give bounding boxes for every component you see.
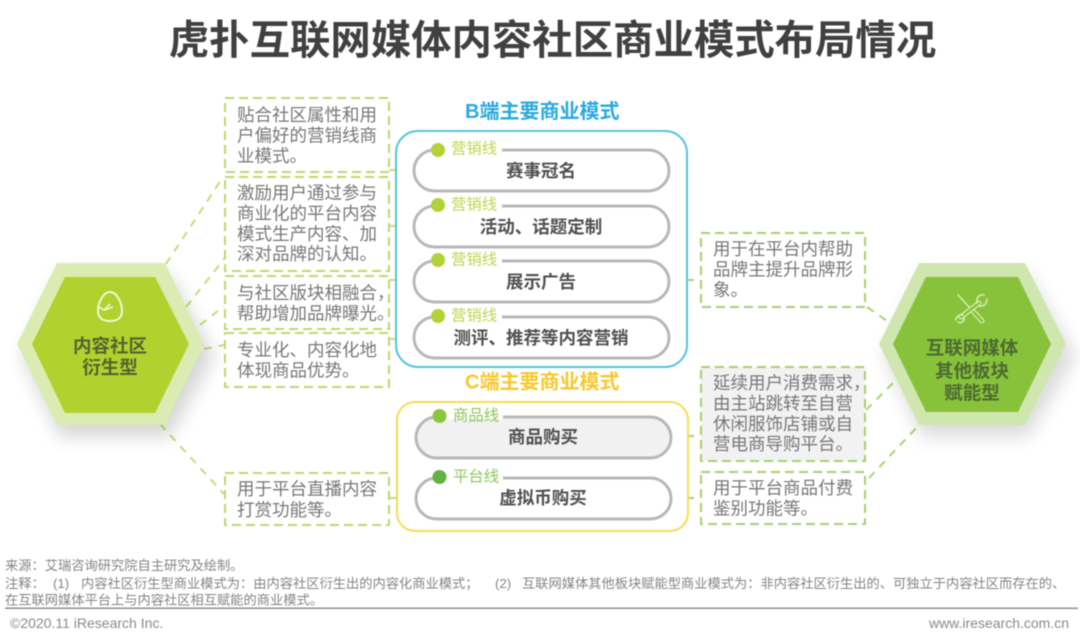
text box: marketing fit: 户偏好的营销线商 bbox=[237, 126, 377, 146]
hexagon label: 互联网媒体 bbox=[926, 338, 1019, 358]
pill: campaign customization bbox=[414, 196, 669, 247]
text box: consumer demand: 休闲服饰店铺或自 bbox=[713, 414, 853, 434]
text box: user generated content: 深对品牌的认知。 bbox=[237, 244, 377, 264]
hexagon label bbox=[926, 338, 1019, 404]
footer rule bbox=[5, 608, 1078, 609]
pill: product purchase: 商品线 bbox=[453, 406, 499, 424]
text box: marketing fit bbox=[225, 98, 389, 172]
pill: event naming: 营销线 bbox=[451, 140, 497, 158]
icon: egg bbox=[98, 292, 122, 321]
pill: display ads: 展示广告 bbox=[506, 272, 576, 292]
text box: user generated content bbox=[225, 177, 389, 271]
connector lines: right hexagon to text boxes bbox=[866, 307, 920, 478]
text box: marketing fit: 业模式。 bbox=[237, 146, 307, 166]
hexagon: content community derived bbox=[17, 263, 214, 437]
text box: brand exposure bbox=[225, 276, 394, 329]
panel: C side business models bbox=[397, 402, 688, 531]
pill: product purchase: 商品购买 bbox=[508, 427, 578, 447]
text box: product advantages: 专业化、内容化地 bbox=[237, 340, 377, 360]
text box: live streaming tips bbox=[225, 473, 389, 525]
pill: display ads bbox=[414, 250, 669, 302]
source and notes bbox=[5, 558, 1065, 608]
text box: brand image: 象。 bbox=[713, 280, 748, 300]
text box: paid authentication: 用于平台商品付费 bbox=[713, 478, 853, 498]
pill: campaign customization: 活动、话题定制 bbox=[480, 217, 602, 237]
hexagon label: 内容社区 bbox=[73, 336, 147, 356]
heading: B side: B端主要商业模式 bbox=[465, 100, 619, 123]
text box: product advantages: 体现商品优势。 bbox=[237, 360, 360, 380]
hexagon label bbox=[73, 336, 147, 378]
text box: brand image: 用于在平台内帮助 bbox=[713, 239, 853, 259]
source and notes: 来源：艾瑞咨询研究院自主研究及绘制。 bbox=[5, 558, 244, 573]
source and notes: 互联网媒体其他板块赋能型商业模式为：非内容社区衍生出的、可独立于内容社区而存在的、 bbox=[522, 574, 1065, 590]
hexagon: other internet media segments bbox=[879, 263, 1076, 437]
source and notes: (1) bbox=[53, 576, 69, 590]
source and notes: 注释： bbox=[5, 576, 45, 590]
pill: content marketing bbox=[414, 306, 669, 358]
pill: product purchase bbox=[416, 406, 671, 458]
pill: virtual currency purchase: 平台线 bbox=[453, 468, 499, 486]
text box: paid authentication bbox=[701, 472, 865, 524]
source and notes: (2) bbox=[495, 576, 511, 590]
panel: B side business models bbox=[396, 131, 687, 367]
heading: C side: C端主要商业模式 bbox=[465, 370, 619, 394]
copyright: ©2020.11 iResearch Inc. bbox=[10, 615, 163, 631]
connector lines: left hexagon to text boxes bbox=[160, 177, 225, 494]
text box: product advantages bbox=[225, 333, 389, 387]
text box: marketing fit: 贴合社区属性和用 bbox=[237, 105, 377, 125]
pill: virtual currency purchase bbox=[416, 468, 671, 519]
website: www.iresearch.com.cn bbox=[928, 615, 1069, 631]
title: 虎扑互联网媒体内容社区商业模式布局情况 bbox=[169, 17, 936, 63]
text box: paid authentication: 鉴别功能等。 bbox=[713, 498, 818, 518]
pill: display ads: 营销线 bbox=[451, 250, 497, 268]
pill: event naming: 赛事冠名 bbox=[506, 161, 576, 181]
text box: live streaming tips: 打赏功能等。 bbox=[237, 500, 342, 520]
connector stubs: panels to text boxes bbox=[389, 170, 701, 498]
pill: campaign customization: 营销线 bbox=[451, 196, 497, 214]
text box: brand exposure: 与社区版块相融合， bbox=[237, 283, 394, 303]
text box: consumer demand bbox=[701, 367, 870, 461]
text box: brand exposure: 帮助增加品牌曝光。 bbox=[237, 304, 394, 324]
text box: brand image bbox=[701, 233, 865, 307]
source and notes: 在互联网媒体平台上与内容社区相互赋能的商业模式。 bbox=[5, 592, 323, 608]
text box: consumer demand: 延续用户消费需求， bbox=[713, 373, 870, 393]
pill: event naming bbox=[414, 140, 669, 191]
text box: user generated content: 模式生产内容、加 bbox=[237, 224, 377, 244]
icon: wrench and screwdriver bbox=[956, 295, 987, 323]
text box: live streaming tips: 用于平台直播内容 bbox=[237, 479, 377, 499]
source and notes: 内容社区衍生型商业模式为：由内容社区衍生出的内容化商业模式； bbox=[81, 574, 479, 592]
text box: consumer demand: 营电商导购平台。 bbox=[713, 434, 853, 454]
text box: consumer demand: 由主站跳转至自营 bbox=[713, 394, 853, 414]
text box: user generated content: 商业化的平台内容 bbox=[237, 204, 377, 224]
pill: virtual currency purchase: 虚拟币购买 bbox=[499, 488, 587, 508]
hexagon label: 其他板块 bbox=[935, 360, 1009, 382]
pill: content marketing: 营销线 bbox=[451, 306, 497, 324]
text box: user generated content: 激励用户通过参与 bbox=[237, 183, 377, 203]
hexagon label: 赋能型 bbox=[944, 382, 1000, 404]
pill: content marketing: 测评、推荐等内容营销 bbox=[454, 328, 628, 348]
text box: brand image: 品牌主提升品牌形 bbox=[713, 260, 853, 280]
hexagon label: 衍生型 bbox=[82, 357, 138, 378]
